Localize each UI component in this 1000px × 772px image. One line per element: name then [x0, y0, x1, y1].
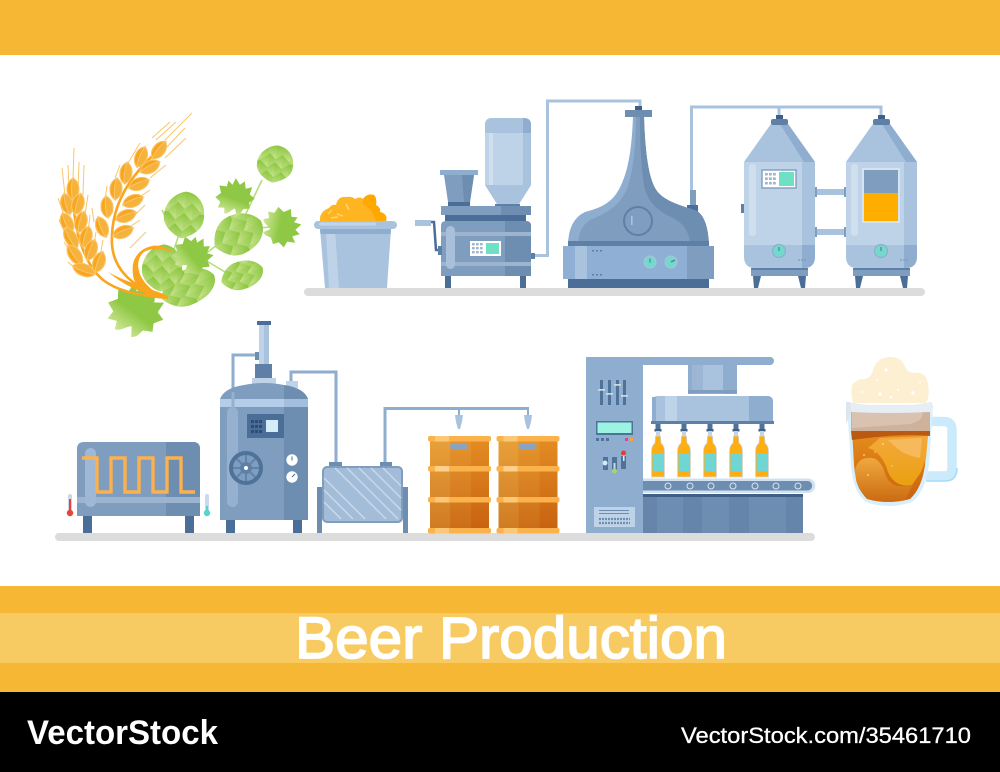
title: Beer Production: [295, 606, 727, 671]
shelf: upper: [304, 288, 925, 296]
hop leaves: [166, 178, 305, 282]
wheat left ear: [57, 148, 108, 280]
small funnel: [440, 170, 478, 206]
thermometer: cold: [204, 494, 210, 516]
glass: [847, 405, 933, 506]
foam: [852, 357, 929, 403]
glass rim: [846, 402, 933, 424]
hood: [651, 365, 774, 424]
top rail: [640, 357, 774, 365]
beer: [851, 412, 930, 502]
top banner: [0, 0, 1000, 55]
pipe to kettle: [531, 101, 640, 256]
display: [596, 421, 633, 441]
watermark logo text: VectorStock: [27, 714, 218, 752]
mash tank: [220, 321, 336, 533]
grain pile: [320, 194, 386, 221]
watermark footer: [0, 692, 1000, 772]
mill body: [441, 206, 531, 215]
tank pipes: [233, 355, 336, 462]
valve wheel: [231, 453, 261, 483]
wheat stems: [73, 147, 168, 298]
watermark url text: VectorStock.com/35461710: [681, 723, 971, 748]
connecting pipes: [815, 187, 846, 237]
crank handle: [415, 220, 442, 255]
heating coil: [82, 458, 195, 492]
heat exchanger: [67, 442, 210, 533]
filter unit: [317, 408, 529, 533]
brew kettle: [563, 106, 881, 288]
mug handle: [926, 422, 952, 476]
dial gauges: [286, 454, 298, 483]
pipes to tanks: [692, 107, 881, 190]
conveyor: [643, 478, 815, 493]
filling nozzles: [455, 410, 532, 429]
title banner: [0, 586, 1000, 692]
control panel: [470, 241, 501, 256]
thermometer: hot: [67, 494, 73, 516]
control display: [247, 414, 284, 438]
bottling line: [586, 357, 815, 533]
wheat right ear: [92, 113, 192, 248]
leaf: bottom: [101, 276, 171, 344]
control column: [586, 357, 643, 533]
hopper tank: [485, 118, 531, 207]
tank control panel: [762, 170, 796, 188]
sliders: [598, 380, 628, 405]
bucket with grain: [314, 194, 397, 288]
porthole: [624, 207, 652, 235]
shelf: lower: [55, 533, 815, 541]
wheat and hops illustration: [57, 113, 305, 344]
grain mill: [415, 101, 640, 288]
gauges: [644, 256, 677, 268]
keypad: [594, 507, 635, 527]
kegs: [428, 436, 560, 534]
bottles: [652, 424, 768, 477]
beer mug: [846, 357, 957, 506]
hop cones: [135, 141, 300, 321]
base cabinet: [643, 494, 803, 533]
fermentation tank: right with beer window: [846, 115, 917, 288]
switches: [602, 450, 626, 474]
fermentation tank: left: [741, 115, 815, 288]
